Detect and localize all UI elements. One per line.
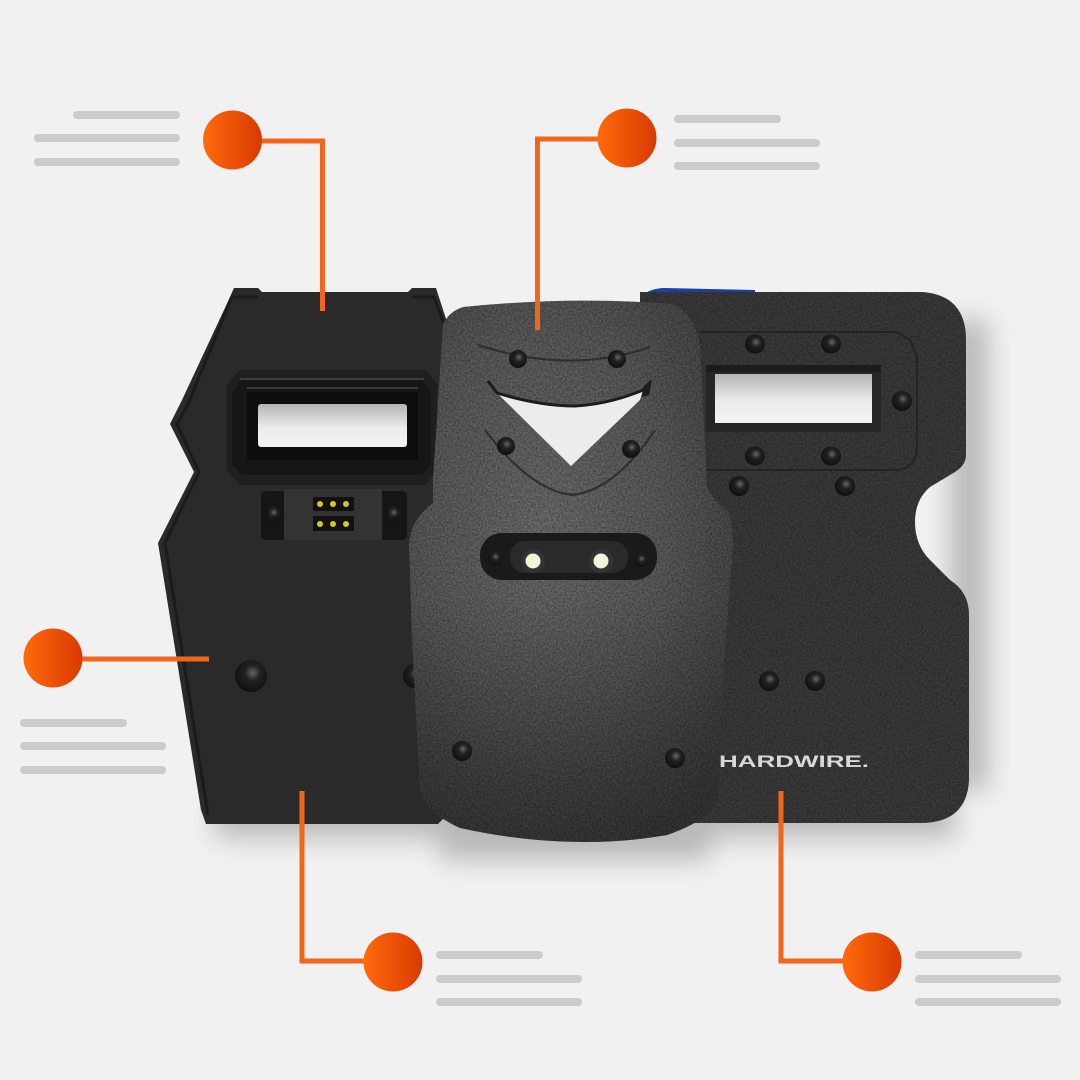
shield: center <box>409 301 733 842</box>
shield: right <box>640 288 969 823</box>
right shield bolts <box>729 334 912 691</box>
brand logo: HARDWIRE. <box>719 752 869 771</box>
right shield viewing window <box>706 365 881 432</box>
callout 1: top left <box>34 110 262 170</box>
callout 5: bottom right <box>842 932 1061 1006</box>
center shield flashlight module <box>480 533 657 580</box>
left shield viewing window frame <box>227 370 437 485</box>
shield: left <box>158 288 447 824</box>
shadows <box>215 320 988 860</box>
callout 2: top center <box>598 108 820 170</box>
center shield bolts <box>452 350 685 768</box>
callout lines <box>60 139 860 961</box>
left shield light connector <box>261 489 407 540</box>
left shield bolts <box>235 660 427 692</box>
callout 4: bottom center <box>364 932 582 1006</box>
callout 3: left <box>20 628 166 774</box>
center shield V-shaped viewport <box>488 379 652 466</box>
